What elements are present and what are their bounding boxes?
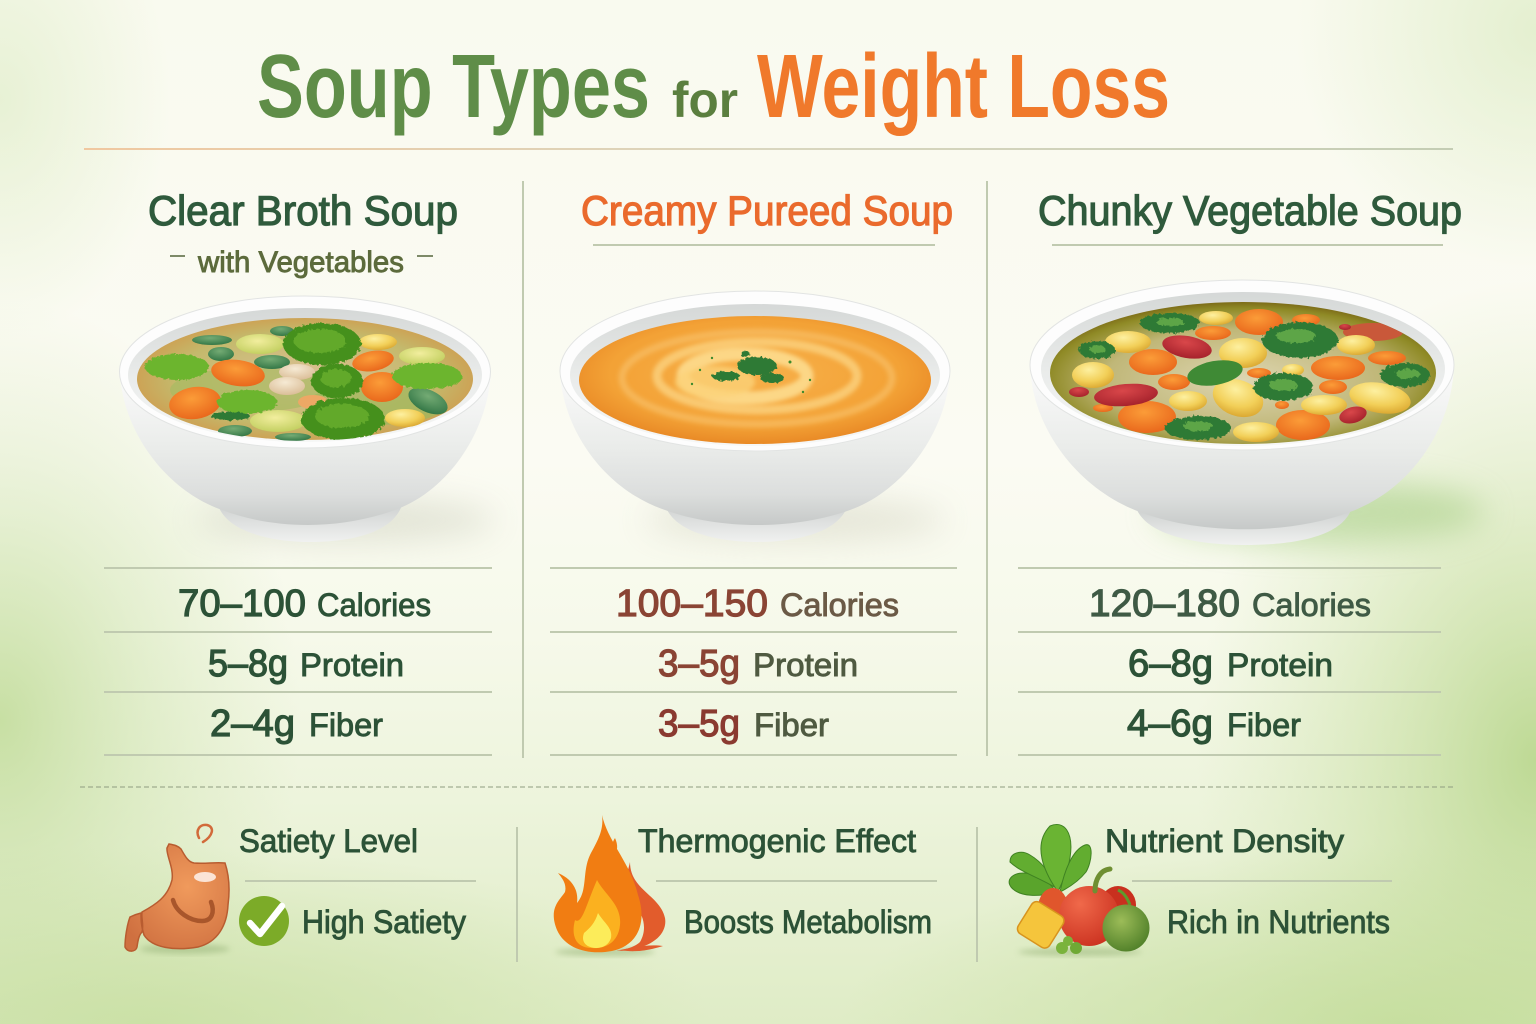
row: protein: Protein: [753, 647, 858, 683]
bowl: creamy orange puree: [560, 291, 950, 542]
row: protein: [1018, 632, 1441, 685]
heading: clear broth soup: [148, 187, 458, 279]
heading: creamy pureed soup: Creamy Pureed Soup: [581, 187, 953, 234]
panel: satiety level: [125, 823, 476, 954]
row: fiber: 2–4g: [210, 703, 295, 745]
heading: thermogenic effect: Thermogenic Effect: [638, 823, 916, 859]
bowl: clear broth with vegetables: [120, 296, 495, 542]
row: protein: [104, 632, 492, 685]
text: boosts metabolism: Boosts Metabolism: [684, 904, 932, 940]
row: fiber: [550, 692, 957, 755]
row: calories: 70–100: [178, 583, 306, 625]
icon: check mark: [239, 896, 289, 946]
panel: chunky vegetable soup: [1018, 187, 1485, 755]
row: fiber: [104, 692, 492, 755]
row: fiber: Fiber: [1227, 707, 1301, 743]
text: high satiety: High Satiety: [302, 904, 466, 940]
panel: creamy pureed soup: [550, 187, 957, 755]
title: [257, 37, 1170, 137]
row: calories: [550, 568, 957, 625]
row: fiber: [1018, 692, 1441, 755]
row: fiber: Fiber: [754, 707, 829, 743]
heading: chunky vegetable soup: Chunky Vegetable Soup: [1038, 187, 1462, 234]
heading: clear broth soup: Clear Broth Soup: [148, 187, 458, 234]
row: protein: [550, 632, 957, 685]
title: Weight Loss: [757, 37, 1170, 137]
row: protein: Protein: [1227, 647, 1333, 683]
row: calories: Calories: [780, 587, 899, 623]
cream swirl: [622, 332, 892, 424]
row: calories: [104, 568, 492, 625]
icon: vegetables and fruit: [1009, 824, 1150, 956]
row: calories: 120–180: [1089, 583, 1240, 625]
panel: nutrient density: [1009, 823, 1392, 956]
text: rich in nutrients: Rich in Nutrients: [1167, 904, 1390, 940]
row: fiber: 3–5g: [658, 703, 740, 745]
title: Soup Types: [257, 37, 650, 137]
title: for: [672, 72, 738, 128]
row: fiber: Fiber: [309, 707, 383, 743]
row: protein: 5–8g: [208, 643, 288, 685]
icon: flame: [554, 815, 665, 956]
row: fiber: 4–6g: [1127, 703, 1213, 745]
heading: clear broth soup: with Vegetables: [197, 246, 404, 279]
row: calories: 100–150: [616, 583, 768, 625]
icon: stomach: [125, 825, 230, 954]
panel: thermogenic effect: [554, 815, 937, 956]
heading: satiety level: Satiety Level: [239, 823, 418, 859]
heading: nutrient density: Nutrient Density: [1105, 823, 1344, 859]
row: protein: Protein: [300, 647, 404, 683]
bowl: chunky vegetables: [1030, 280, 1485, 545]
herb garnish: [691, 351, 811, 393]
row: protein: 6–8g: [1128, 643, 1213, 685]
row: protein: 3–5g: [658, 643, 740, 685]
row: calories: [1018, 568, 1441, 625]
panel: clear broth soup: [104, 187, 495, 755]
row: calories: Calories: [1252, 587, 1371, 623]
row: calories: Calories: [317, 587, 431, 623]
